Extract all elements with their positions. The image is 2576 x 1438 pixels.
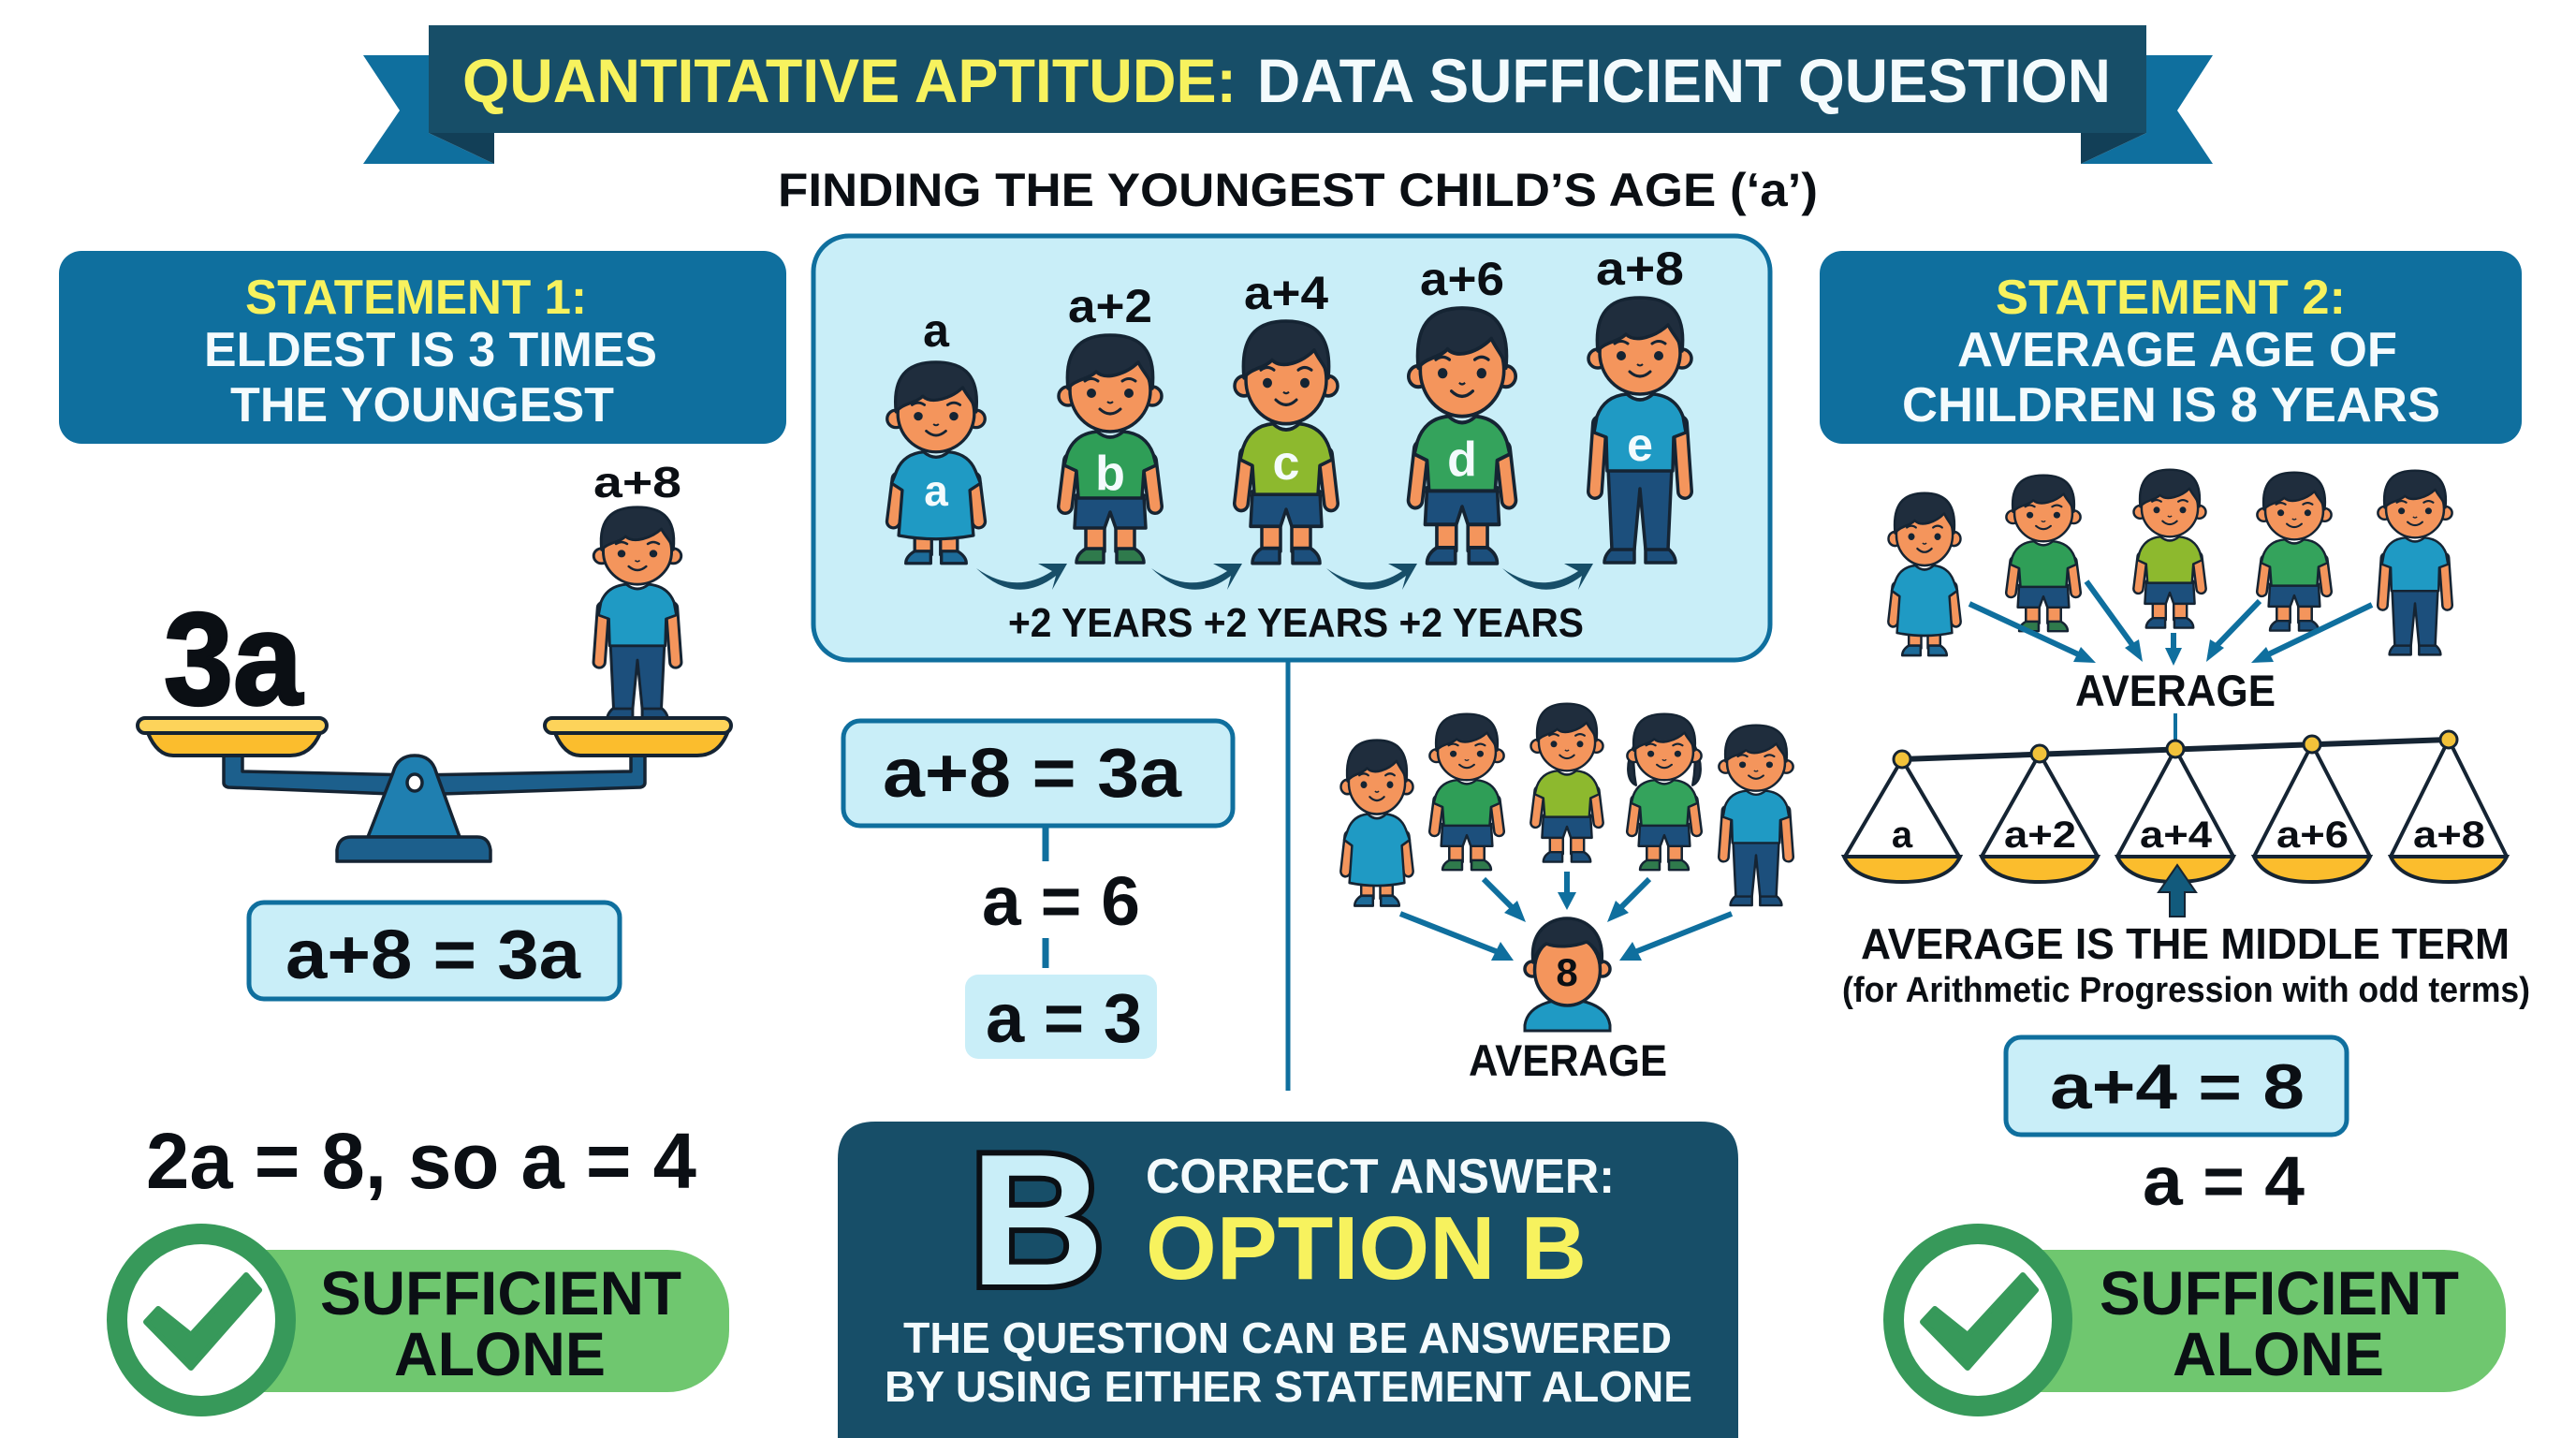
- child 2: [1429, 714, 1504, 870]
- explanation: BY USING EITHER STATEMENT ALONE: [885, 1362, 1692, 1411]
- statement 2 text: AVERAGE AGE OF: [1957, 323, 2397, 377]
- child c: [1235, 267, 1338, 564]
- statement 2 text: [1902, 271, 2440, 433]
- equation box a+8=3a: a+8 = 3a: [883, 734, 1182, 812]
- child 1: [1340, 741, 1413, 905]
- scale balance: statement 1: [138, 458, 731, 861]
- panel: answer: [838, 1116, 1738, 1438]
- a = 3 highlighted: a = 3: [986, 979, 1142, 1057]
- statement 2 text: STATEMENT 2:: [1996, 271, 2346, 325]
- child c: c: [1273, 436, 1299, 491]
- child e: a+8: [1596, 242, 1684, 295]
- pan a+8: [2391, 731, 2507, 882]
- progression arrows: [976, 564, 1593, 590]
- child c: a+4: [1244, 267, 1328, 319]
- badge: sufficient alone right: [1894, 1234, 2506, 1406]
- child d: a+6: [1420, 253, 1504, 305]
- statement 2 text: CHILDREN IS 8 YEARS: [1902, 378, 2440, 433]
- balance beam and stand: [224, 755, 645, 861]
- child 3: [2134, 470, 2205, 628]
- statement 1 text: [204, 271, 657, 433]
- average child head with 8: 8: [1556, 950, 1578, 994]
- statement 1 text: STATEMENT 1:: [245, 271, 587, 325]
- badge: sufficient alone left: [117, 1234, 729, 1406]
- big letter B: B: [970, 1116, 1105, 1325]
- badge: sufficient alone right: SUFFICIENT: [2100, 1258, 2459, 1328]
- explanation: THE QUESTION CAN BE ANSWERED: [903, 1313, 1672, 1362]
- correct answer label: CORRECT ANSWER:: [1146, 1150, 1615, 1204]
- pan a+4: a+4: [2140, 814, 2213, 856]
- equation box a+8=3a: [843, 721, 1233, 826]
- middle term explanation: AVERAGE IS THE MIDDLE TERM: [1861, 919, 2510, 968]
- pan a: [1844, 751, 1960, 882]
- equation box: a+8=3a left: [249, 902, 620, 999]
- pan a+6: a+6: [2276, 814, 2349, 856]
- up arrow to middle term: [2159, 865, 2196, 917]
- child 4: [2257, 473, 2332, 631]
- average label: AVERAGE: [1469, 1035, 1667, 1085]
- converging arrows: [1400, 872, 1732, 961]
- equation box a+4=8: a+4 = 8: [2050, 1051, 2305, 1123]
- child 4: [1627, 714, 1702, 870]
- statement 1 text: THE YOUNGEST: [230, 378, 614, 433]
- equation stack: centre solving: [843, 721, 1233, 1059]
- five-term balance: [1844, 713, 2507, 917]
- panel: five children in arithmetic progression: [813, 236, 1770, 660]
- children to average: statement 2: [1889, 470, 2452, 715]
- badge: sufficient alone left: SUFFICIENT: [320, 1258, 681, 1328]
- child 5: [1719, 726, 1793, 905]
- option b: OPTION B: [1146, 1198, 1587, 1299]
- pan a+6: [2254, 736, 2370, 882]
- average child head with 8: [1525, 918, 1610, 1031]
- middle term explanation: (for Arithmetic Progression with odd terms): [1842, 971, 2530, 1010]
- equation a = 4: a = 4: [2143, 1142, 2305, 1220]
- badge: sufficient alone left: ALONE: [394, 1319, 606, 1388]
- eldest child on scale: a+8: [593, 458, 681, 506]
- left pan: [138, 718, 327, 756]
- equation box a+4=8: [2006, 1037, 2347, 1135]
- child 1: [1889, 493, 1960, 655]
- +2 years labels: +2 YEARS +2 YEARS +2 YEARS: [1008, 600, 1584, 646]
- child 3: [1531, 704, 1603, 862]
- middle term explanation: [1842, 919, 2530, 1010]
- pan a+4: [2117, 741, 2233, 882]
- a = 6: a = 6: [982, 862, 1140, 940]
- panel: statement 2 header: [1820, 251, 2522, 444]
- badge: sufficient alone right: ALONE: [2173, 1319, 2384, 1388]
- subtitle: FINDING THE YOUNGEST CHILD’S AGE (‘a’): [778, 164, 1818, 216]
- title text: DATA SUFFICIENT QUESTION: [1257, 46, 2111, 115]
- child a: a: [924, 466, 948, 515]
- child d: d: [1447, 433, 1477, 487]
- pan a+2: a+2: [2004, 814, 2076, 856]
- title banner: [363, 25, 2213, 164]
- right pan: [545, 718, 731, 756]
- panel: statement 1 header: [59, 251, 786, 444]
- pan a+2: [1982, 745, 2098, 882]
- equation box: a+8=3a left: a+8 = 3a: [285, 916, 581, 993]
- child 2: [2006, 476, 2081, 631]
- child b: a+2: [1068, 280, 1152, 332]
- arrows: [1969, 581, 2372, 666]
- label 3a: 3a: [164, 585, 303, 732]
- child b: [1059, 280, 1162, 563]
- child 5: [2378, 471, 2452, 654]
- child a: a: [923, 304, 950, 357]
- title text: QUANTITATIVE APTITUDE:: [462, 46, 1237, 115]
- children converge to average: [1340, 704, 1793, 1085]
- pan a: a: [1892, 814, 1913, 856]
- child e: [1588, 242, 1691, 563]
- pan a+8: a+8: [2413, 814, 2485, 856]
- eldest child on scale: [593, 458, 681, 719]
- equation: 2a = 8 so a = 4: 2a = 8, so a = 4: [146, 1117, 696, 1205]
- child b: b: [1095, 447, 1125, 501]
- statement 1 text: ELDEST IS 3 TIMES: [204, 323, 657, 377]
- child e: e: [1627, 418, 1653, 471]
- child a: [887, 304, 985, 564]
- child d: [1409, 253, 1515, 564]
- explanation: [885, 1313, 1692, 1411]
- average label: AVERAGE: [2075, 666, 2276, 715]
- divider line from panel: [1286, 662, 1290, 1091]
- title text: [462, 46, 2111, 115]
